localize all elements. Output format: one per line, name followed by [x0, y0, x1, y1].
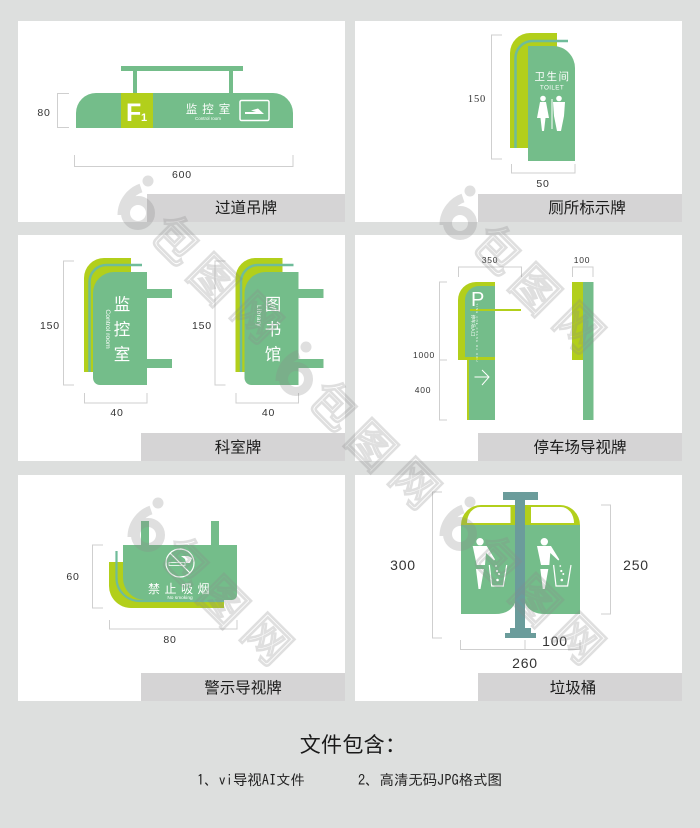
watermark 3 — [132, 498, 302, 675]
dimension: 80 — [37, 94, 69, 128]
department sign: library: 书 — [265, 320, 281, 339]
panel: parking sign — [355, 235, 682, 461]
toilet sign body: TOILET — [540, 84, 564, 92]
watermark 3: 网 — [232, 605, 302, 675]
parking sign side view — [572, 282, 594, 420]
watermark 1 — [122, 176, 292, 353]
trash bin right — [525, 505, 580, 614]
watermark 2: 图 — [336, 411, 406, 481]
dimension: 150 — [468, 35, 502, 159]
pole — [503, 492, 538, 638]
dimension: 600: 600 — [172, 169, 192, 181]
trash bin left — [461, 505, 515, 614]
watermark 2 — [280, 342, 450, 519]
watermark 4: 包 — [462, 215, 532, 285]
dimension: 100: 100 — [574, 255, 590, 265]
dimension: 40 right — [236, 393, 298, 419]
hanging sign: 1 — [141, 112, 147, 124]
dimension: 300 — [390, 492, 442, 638]
icon: person and bin — [537, 538, 571, 589]
watermark 5: 包 — [462, 526, 532, 596]
toilet sign body: 卫生间 — [534, 70, 570, 83]
dimension: 150 right: 150 — [192, 320, 212, 332]
caption: 停车场导视牌 — [533, 438, 627, 456]
watermark 1: 网 — [222, 283, 292, 353]
hanging sign: F — [126, 99, 141, 127]
dimension: 50 — [512, 164, 575, 190]
department sign: monitoring room — [84, 258, 172, 385]
dimension: 350 — [458, 255, 522, 277]
caption: 过道吊牌 — [215, 199, 277, 217]
icon: person and bin — [473, 538, 507, 589]
dimension: 60 — [66, 545, 103, 608]
dimension: 150: 150 — [468, 94, 486, 105]
caption: 厕所标示牌 — [548, 199, 626, 217]
watermarks — [122, 176, 614, 675]
watermark 1: 包 — [140, 205, 210, 275]
caption: 警示导视牌 — [204, 679, 282, 697]
watermark 4: 网 — [544, 293, 614, 363]
dimension: 80 — [110, 620, 237, 646]
dimension: 40 right: 40 — [262, 407, 275, 419]
footer text: item 2: 2、高清无码JPG格式图 — [358, 772, 502, 787]
dimension: 1000 and 400: 400 — [415, 385, 431, 395]
department sign: library — [236, 258, 324, 385]
icon: woman — [537, 96, 549, 131]
department sign: library: 馆 — [265, 345, 281, 364]
dimension: 600 — [74, 155, 293, 181]
department sign: monitoring room: 控 — [114, 320, 130, 339]
panel: passage hanging sign — [18, 21, 345, 222]
panel: toilet sign — [355, 21, 682, 222]
parking sign front view: 停车场入口 — [470, 315, 476, 336]
watermark 3: 图 — [188, 567, 258, 637]
dimension: 100 — [572, 255, 593, 277]
watermark 1: 图 — [178, 245, 248, 315]
dimension: 60: 60 — [66, 571, 80, 583]
caption: 科室牌 — [215, 438, 261, 456]
watermark 5: 网 — [544, 604, 614, 674]
hanging sign: Control room — [195, 116, 221, 121]
panel: trash bin — [355, 475, 682, 701]
dimension: 300: 300 — [390, 557, 416, 573]
department sign: library: 图 — [265, 296, 281, 314]
watermark 2: 网 — [380, 449, 450, 519]
dimension: 40 left: 40 — [110, 407, 124, 419]
dimension: 150 right — [192, 261, 226, 385]
dimension: 150 left — [40, 261, 74, 385]
dimension: 1000 and 400: 1000 — [413, 350, 435, 360]
dimension: 100 and 260: 100 — [542, 633, 568, 649]
dimension: 250: 250 — [623, 557, 649, 573]
watermark 4: 图 — [500, 255, 570, 325]
hanging sign — [76, 66, 293, 128]
parking sign front view: P — [471, 289, 484, 311]
department sign: monitoring room: 监 — [114, 295, 130, 314]
dimension: 80: 80 — [37, 107, 51, 119]
dimension: 150 left: 150 — [40, 320, 60, 332]
dimension: 40 left — [84, 393, 147, 419]
dimension: 100 and 260: 260 — [512, 655, 538, 671]
icon: no smoking — [166, 549, 194, 577]
caption: 垃圾桶 — [550, 679, 596, 697]
dimension: 350: 350 — [482, 255, 498, 265]
panel: department signs — [18, 235, 345, 461]
watermark 2: 包 — [298, 371, 368, 441]
dimension: 1000 and 400 — [413, 282, 447, 420]
footer text: item 1: 1、vi导视AI文件 — [197, 772, 305, 788]
footer heading: 文件包含： — [300, 729, 406, 759]
dimension: 50: 50 — [536, 178, 550, 190]
department sign: library: Library — [255, 305, 261, 327]
parking sign front view: TING CHE CHANG RU KOU — [475, 303, 478, 363]
toilet sign body — [510, 33, 575, 161]
hanging sign: 监控室 — [186, 102, 235, 116]
warning sign — [109, 521, 237, 608]
parking sign front view — [458, 282, 521, 420]
dimension: 100 and 260 — [460, 633, 580, 671]
icon: man — [553, 96, 565, 131]
warning sign: No smoking — [167, 595, 193, 601]
icon: arrow — [474, 370, 489, 385]
watermark 4 — [444, 186, 614, 363]
department sign: monitoring room: Control room — [104, 309, 111, 349]
department sign: monitoring room: 室 — [114, 345, 130, 364]
panel: warning sign — [18, 475, 345, 701]
watermark 5 — [444, 496, 614, 674]
dimension: 250 — [601, 505, 649, 614]
watermark 5: 图 — [500, 566, 570, 636]
watermark 3: 包 — [150, 527, 220, 597]
dimension: 80: 80 — [163, 634, 177, 646]
warning sign: 禁止吸烟 — [148, 582, 214, 596]
